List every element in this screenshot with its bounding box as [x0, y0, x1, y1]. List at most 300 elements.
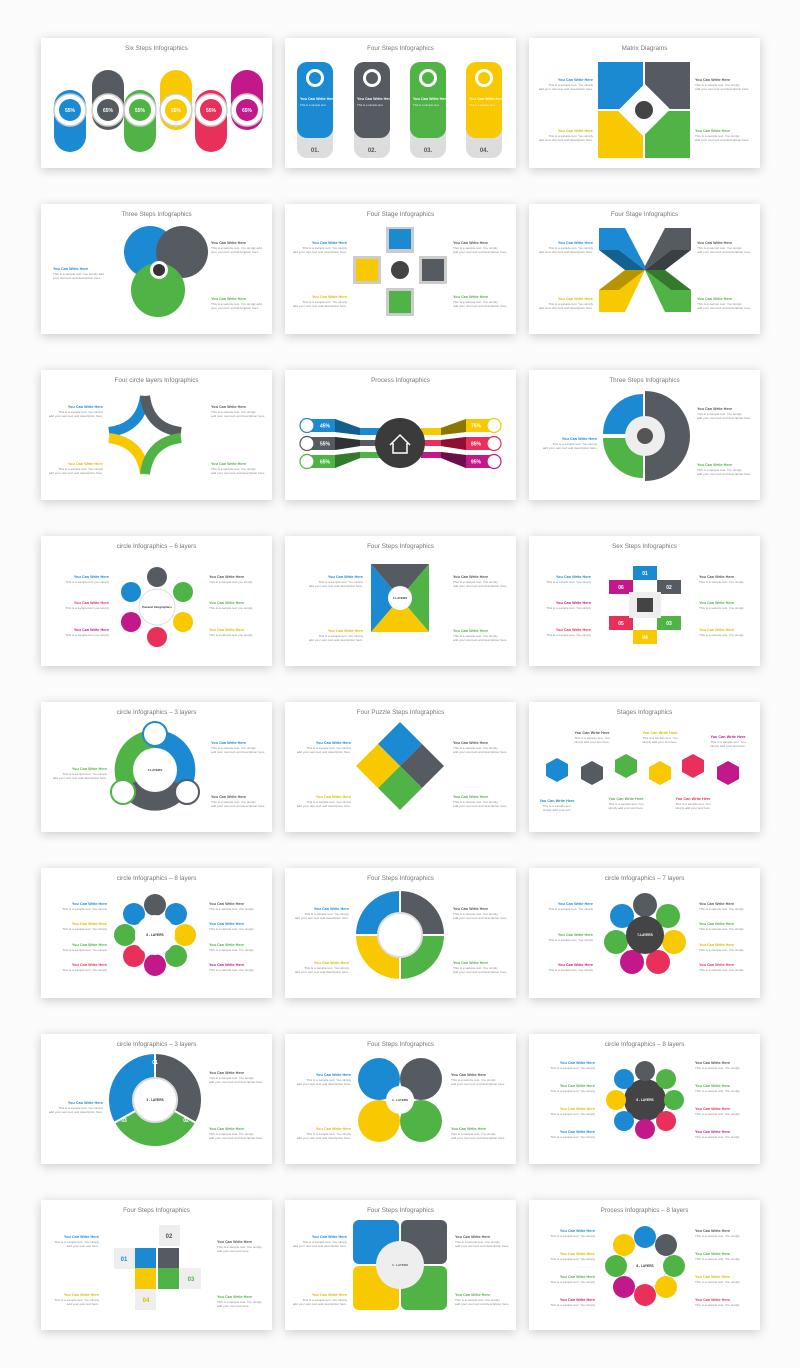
- text blocks: You Can Write Here: [560, 1252, 595, 1256]
- text blocks: This is a sample text. You simply: [699, 948, 744, 952]
- title: Four Steps Infographics: [367, 45, 434, 52]
- card: circle Infographics – 7 layers: [529, 868, 760, 998]
- text blocks: This is a sample text. You simply: [546, 633, 591, 637]
- text blocks: [49, 1071, 263, 1140]
- text blocks: You Can Write Here: [72, 943, 107, 947]
- step columns: 01.: [311, 148, 320, 154]
- text blocks: simply add your text here.: [642, 740, 678, 744]
- text blocks: add your own text and description here.: [455, 1302, 509, 1306]
- text blocks: This is a sample text. You simply: [209, 927, 254, 931]
- text blocks: You Can Write Here: [211, 405, 246, 409]
- text blocks: add your own text and description here.: [209, 1080, 263, 1084]
- text blocks: This is a sample text. You simply: [451, 1078, 496, 1082]
- text blocks: You Can Write Here: [209, 575, 244, 579]
- title: Four Stage Infographics: [367, 211, 434, 218]
- text blocks: This is a sample text you simply: [209, 633, 253, 637]
- text blocks: You Can Write Here: [455, 1293, 490, 1297]
- text blocks: You Can Write Here: [451, 1127, 486, 1131]
- text blocks: This is a sample text. You simply: [453, 912, 498, 916]
- text blocks: You Can Write Here: [53, 267, 88, 271]
- text blocks: This is a sample text. You simply: [550, 1280, 595, 1284]
- text blocks: You Can Write Here: [695, 78, 730, 82]
- card: Four Steps Infographics (petals): [285, 1034, 516, 1164]
- text blocks: This is a sample text. You simply: [217, 1245, 262, 1249]
- card: Four Stage Infographics (X): [529, 204, 760, 334]
- petals: 4 - LAYERS: [392, 1098, 408, 1102]
- text blocks: This is a sample text. You simply: [548, 938, 593, 942]
- text blocks: This is a sample text you simply: [65, 633, 109, 637]
- hexagons: [609, 566, 681, 644]
- text blocks: You Can Write Here: [316, 1073, 351, 1077]
- text blocks: You Can Write Here: [558, 78, 593, 82]
- text blocks: You Can Write Here: [558, 902, 593, 906]
- text blocks: add your own text and description here.: [453, 304, 507, 308]
- text blocks: simply add your text here.: [574, 740, 610, 744]
- text blocks: This is a sample text. You simply: [548, 134, 593, 138]
- donut: 03: [121, 1118, 127, 1124]
- text blocks: You Can Write Here: [312, 295, 347, 299]
- blocks: 04: [143, 1298, 150, 1304]
- blocks: [114, 1225, 201, 1310]
- card: Process Infographics: [285, 370, 516, 500]
- title: circle Infographics – 7 layers: [605, 875, 684, 882]
- text blocks: This is a sample text. You simply: [699, 968, 744, 972]
- text blocks: You Can Write Here: [68, 1101, 103, 1105]
- ring: [355, 890, 445, 980]
- text blocks: This is a sample text. You simply: [550, 1112, 595, 1116]
- step columns: You Can Write Here: [357, 97, 392, 101]
- text blocks: This is a sample text. You simply: [697, 302, 742, 306]
- text blocks: This is a sample text you simply: [209, 580, 253, 584]
- card: Six Steps Infographics: [41, 38, 272, 168]
- text blocks: You Can Write Here: [314, 961, 349, 965]
- text blocks: [53, 741, 265, 808]
- text blocks: [309, 575, 507, 642]
- text blocks: This is a sample text. You simply: [58, 467, 103, 471]
- text blocks: add your own text and description here.: [697, 416, 751, 420]
- text blocks: [548, 902, 744, 972]
- petals: 7-LAYERS: [637, 933, 653, 937]
- title: Four Steps Infographics: [367, 1041, 434, 1048]
- text blocks: [550, 1229, 740, 1307]
- text blocks: You Can Write Here: [697, 241, 732, 245]
- text blocks: This is a sample text. You simply: [699, 606, 744, 610]
- text blocks: add your own text here.: [67, 1244, 99, 1248]
- text blocks: add your own text and description here.: [297, 1082, 351, 1086]
- text blocks: You Can Write Here: [560, 1107, 595, 1111]
- text blocks: add your own text and description here.: [309, 584, 363, 588]
- text blocks: You Can Write Here: [453, 295, 488, 299]
- text blocks: This is a sample text. You simply: [453, 246, 498, 250]
- text blocks: You Can Write Here: [209, 628, 244, 632]
- text blocks: You Can Write Here: [560, 1229, 595, 1233]
- text blocks: add your own text and description here.: [49, 414, 103, 418]
- text blocks: You Can Write Here: [699, 601, 734, 605]
- text blocks: You Can Write Here: [697, 463, 732, 467]
- text blocks: add your own text and description here.: [453, 584, 507, 588]
- text blocks: add your own text and description here.: [309, 638, 363, 642]
- blocks: 02: [166, 1234, 173, 1240]
- text blocks: This is a sample text. You simply: [697, 412, 742, 416]
- bars: 45%: [320, 424, 331, 430]
- step columns: This is a sample text.: [413, 103, 439, 107]
- text blocks: add your own text and description here.: [209, 1136, 263, 1140]
- text blocks: This is a sample text. You simply: [58, 410, 103, 414]
- text blocks: This is a sample text. You: [608, 802, 644, 806]
- text blocks: This is a sample text.: [542, 804, 572, 808]
- text blocks: You Can Write Here: [72, 922, 107, 926]
- text blocks: add your own text and description here.: [293, 250, 347, 254]
- text blocks: This is a sample text. You simply: [546, 606, 591, 610]
- text blocks: [293, 1235, 509, 1306]
- text blocks: add your own text and description here.: [211, 750, 265, 754]
- text blocks: This is a sample text. You simply: [306, 800, 351, 804]
- text blocks: You Can Write Here: [72, 963, 107, 967]
- card: circle Infographics – 6 layers: [41, 536, 272, 666]
- text blocks: add your own text and description here.: [211, 414, 265, 418]
- text blocks: This is a sample text you simply: [65, 606, 109, 610]
- card: Four Steps Infographics: [285, 38, 516, 168]
- text blocks: add your own text and description here.: [453, 916, 507, 920]
- text blocks: add your own text and description here.: [543, 446, 597, 450]
- card: Three Steps Infographics: [41, 204, 272, 334]
- hexagons: 05: [618, 621, 624, 627]
- text blocks: [62, 902, 254, 972]
- title: Four Stage Infographics: [611, 211, 678, 218]
- text blocks: [49, 405, 265, 475]
- text blocks: This is a sample text. You simply: [695, 1257, 740, 1261]
- title: circle Infographics – 3 layers: [117, 709, 196, 716]
- text blocks: This is a sample text. You simply add: [211, 302, 262, 306]
- text blocks: simply add your text here.: [675, 806, 711, 810]
- text blocks: add your own text here.: [217, 1304, 249, 1308]
- text blocks: [54, 1235, 262, 1308]
- text blocks: This is a sample text you simply: [65, 580, 109, 584]
- text blocks: You Can Write Here: [560, 1130, 595, 1134]
- text blocks: This is a sample text. You simply: [302, 1298, 347, 1302]
- text blocks: You Can Write Here: [699, 628, 734, 632]
- text blocks: You Can Write Here: [453, 575, 488, 579]
- text blocks: This is a sample text. You simply: [54, 1240, 99, 1244]
- text blocks: your own text and description here.: [53, 276, 101, 280]
- text blocks: This is a sample text. You simply: [302, 246, 347, 250]
- title: circle Infographics – 3 layers: [117, 1041, 196, 1048]
- ring: 8 - LAYERS: [636, 1098, 654, 1102]
- text blocks: This is a sample text. You simply: [699, 633, 744, 637]
- text blocks: This is a sample text. You simply: [62, 948, 107, 952]
- card: Four Steps Infographics (square): [285, 536, 516, 666]
- text blocks: You Can Write Here: [699, 902, 734, 906]
- text blocks: add your own text and description here.: [297, 804, 351, 808]
- text blocks: This is a sample text. You simply: [455, 1240, 500, 1244]
- text blocks: This is a sample text. You simply: [209, 1076, 254, 1080]
- title: Sex Steps Infographics: [612, 543, 677, 550]
- text blocks: add your own text and description here.: [49, 471, 103, 475]
- text blocks: This is a sample text. You simply: [62, 772, 107, 776]
- text blocks: add your own text and description here.: [697, 250, 751, 254]
- step columns: This is a sample text.: [300, 103, 326, 107]
- text blocks: This is a sample text. You simply: [58, 1106, 103, 1110]
- text blocks: You Can Write Here: [695, 1130, 730, 1134]
- title: Four circle layers Infographics: [114, 377, 198, 384]
- text blocks: You Can Write Here: [558, 129, 593, 133]
- card: Four Puzzle Steps Infographics: [285, 702, 516, 832]
- text blocks: This is a sample text. You simply: [318, 580, 363, 584]
- text blocks: This is a sample text. You simply: [695, 1066, 740, 1070]
- bars: [300, 418, 501, 468]
- text blocks: This is a sample text. You simply: [550, 1066, 595, 1070]
- text blocks: [550, 1061, 740, 1139]
- text blocks: add your own text and description here.: [697, 306, 751, 310]
- text blocks: add your own text and description here.: [539, 87, 593, 91]
- circle ring: Paceral Infographics: [142, 605, 172, 609]
- puzzle diamond: [356, 722, 444, 810]
- donut: [603, 391, 690, 481]
- text blocks: You Can Write Here: [558, 241, 593, 245]
- card: Process Infographics – 8 layers: [529, 1200, 760, 1330]
- text blocks: This is a sample text. You simply: [455, 1298, 500, 1302]
- text blocks: You Can Write Here: [209, 963, 244, 967]
- text blocks: You Can Write Here: [209, 902, 244, 906]
- blocks: 01: [121, 1257, 128, 1263]
- text blocks: add your own text and description here.: [451, 1082, 505, 1086]
- text blocks: This is a sample text. You simply: [550, 1234, 595, 1238]
- title: circle Infographics – 8 layers: [117, 875, 196, 882]
- text blocks: This is a sample text. You simply: [211, 800, 256, 804]
- ring: [605, 1226, 685, 1306]
- text blocks: This is a sample text. You simply: [302, 1240, 347, 1244]
- text blocks: add your own text and description here.: [453, 750, 507, 754]
- text blocks: You Can Write Here: [558, 933, 593, 937]
- bars: 55%: [320, 442, 331, 448]
- text blocks: This is a sample text. You simply: [209, 907, 254, 911]
- circles: [124, 226, 208, 317]
- text blocks: You Can Write Here: [695, 1107, 730, 1111]
- text blocks: This is a sample text. You: [710, 740, 746, 744]
- title: Process Infographics: [371, 377, 430, 384]
- title: circle Infographics – 6 layers: [117, 543, 196, 550]
- text blocks: This is a sample text. You simply: [697, 468, 742, 472]
- step columns: This is a sample text.: [469, 103, 495, 107]
- step pills: 55%: [135, 108, 146, 114]
- text blocks: You Can Write Here: [211, 462, 246, 466]
- curved star: [109, 396, 181, 474]
- step columns: [297, 62, 504, 158]
- text blocks: This is a sample text. You simply: [62, 968, 107, 972]
- text blocks: add your own text and description here.: [49, 1110, 103, 1114]
- text blocks: This is a sample text. You simply: [209, 968, 254, 972]
- blocks: 03: [188, 1277, 195, 1283]
- text blocks: This is a sample text. You simply: [699, 907, 744, 911]
- text blocks: This is a sample text. You simply: [550, 1135, 595, 1139]
- text blocks: simply add your text.: [543, 808, 571, 812]
- petals: [114, 894, 196, 976]
- text blocks: You Can Write Here: [72, 902, 107, 906]
- text blocks: simply add your text here.: [608, 806, 644, 810]
- text blocks: This is a sample text. You simply: [451, 1132, 496, 1136]
- text blocks: You Can Write Here: [328, 575, 363, 579]
- title: Four Steps Infographics: [367, 543, 434, 550]
- square with triangles: 4 LAYERS: [393, 596, 407, 600]
- text blocks: add your own text and description here.: [211, 471, 265, 475]
- step pills: 65%: [242, 108, 253, 114]
- text blocks: This is a sample text. You simply: [550, 1257, 595, 1261]
- text blocks: This is a sample text. You simply: [697, 246, 742, 250]
- text blocks: You Can Write Here: [209, 922, 244, 926]
- text blocks: This is a sample text. You simply: [453, 580, 498, 584]
- text blocks: You Can Write Here: [695, 129, 730, 133]
- text blocks: You Can Write Here: [453, 241, 488, 245]
- text blocks: This is a sample text. You simply: [695, 1234, 740, 1238]
- card: Sex Steps Infographics (hexagons): [529, 536, 760, 666]
- cross squares: [353, 227, 447, 316]
- text blocks: [539, 731, 746, 812]
- text blocks: add your own text and description here.: [695, 87, 749, 91]
- text blocks: This is a sample text. You simply: [302, 300, 347, 304]
- text blocks: You Can Write Here: [558, 297, 593, 301]
- text blocks: [297, 741, 507, 808]
- text blocks: You Can Write Here: [74, 628, 109, 632]
- text blocks: [295, 907, 507, 974]
- text blocks: This is a sample text. You simply: [209, 1132, 254, 1136]
- text blocks: add your own text and description here.: [455, 1244, 509, 1248]
- title: Four Steps Infographics: [123, 1207, 190, 1214]
- text blocks: This is a sample text. You simply: [695, 1303, 740, 1307]
- text blocks: This is a sample text. You simply: [453, 300, 498, 304]
- text blocks: You Can Write Here: [217, 1240, 252, 1244]
- text blocks: You Can Write Here: [64, 1235, 99, 1239]
- card: circle Infographics – 3 layers: [41, 702, 272, 832]
- text blocks: add your own text and description here.: [297, 750, 351, 754]
- text blocks: You Can Write Here: [695, 1061, 730, 1065]
- quadrants: [353, 1220, 447, 1310]
- step columns: 03.: [424, 148, 433, 154]
- text blocks: You Can Write Here: [697, 297, 732, 301]
- card: circle Infographics – 8 layers: [41, 868, 272, 998]
- text blocks: This is a sample text. You simply: [211, 410, 256, 414]
- text blocks: You Can Write Here: [556, 575, 591, 579]
- text blocks: This is a sample text. You simply add: [211, 246, 262, 250]
- card: Four Steps Infographics (blocks): [41, 1200, 272, 1330]
- card: Stages Infographics: [529, 702, 760, 832]
- text blocks: This is a sample text. You simply: [695, 83, 740, 87]
- text blocks: add your own text and description here.: [293, 304, 347, 308]
- text blocks: This is a sample text. You simply: [304, 912, 349, 916]
- text blocks: add your own text here.: [217, 1249, 249, 1253]
- donut: 01: [152, 1060, 158, 1066]
- text blocks: simply add your text here.: [710, 744, 746, 748]
- text blocks: You Can Write Here: [453, 795, 488, 799]
- text blocks: You Can Write Here: [699, 922, 734, 926]
- text blocks: This is a sample text. You simply: [453, 966, 498, 970]
- text blocks: You Can Write Here: [695, 1252, 730, 1256]
- text blocks: This is a sample text. You simply: [695, 134, 740, 138]
- text blocks: This is a sample text. You simply: [54, 1298, 99, 1302]
- text blocks: You Can Write Here: [312, 1293, 347, 1297]
- text blocks: You Can Write Here: [699, 963, 734, 967]
- text blocks: This is a sample text. You simply: [548, 968, 593, 972]
- petals: 8 - LAYERS: [146, 933, 164, 937]
- text blocks: You Can Write Here: [217, 1295, 252, 1299]
- ring: [111, 722, 199, 811]
- text blocks: This is a sample text. You simply: [217, 1300, 262, 1304]
- text blocks: This is a sample text. You simply: [548, 907, 593, 911]
- text blocks: [543, 407, 751, 476]
- text blocks: This is a sample text. You simply: [550, 1303, 595, 1307]
- text blocks: add your own text and description here.: [53, 776, 107, 780]
- matrix: [598, 62, 690, 158]
- text blocks: This is a sample text. You simply: [453, 634, 498, 638]
- bars: 85%: [471, 442, 482, 448]
- text blocks: [539, 78, 749, 142]
- text blocks: You Can Write Here: [562, 437, 597, 441]
- title: Stages Infographics: [617, 709, 672, 716]
- text blocks: You Can Write Here: [211, 795, 246, 799]
- text blocks: You Can Write Here: [64, 1293, 99, 1297]
- text blocks: This is a sample text. You simply: [211, 467, 256, 471]
- text blocks: You Can Write Here: [695, 1229, 730, 1233]
- text blocks: This is a sample text. You simply: [62, 927, 107, 931]
- text blocks: add your own text and description here.: [211, 804, 265, 808]
- hexagons row: [546, 754, 739, 785]
- step columns: You Can Write Here: [413, 97, 448, 101]
- text blocks: You Can Write Here: [312, 241, 347, 245]
- donut: [108, 1053, 202, 1147]
- text blocks: This is a sample text. You simply: [209, 948, 254, 952]
- text blocks: You Can Write Here: [68, 462, 103, 466]
- text blocks: add your own text and description here.: [295, 916, 349, 920]
- text blocks: You Can Write Here: [453, 741, 488, 745]
- text blocks: You Can Write Here: [314, 907, 349, 911]
- title: Matrix Diagrams: [622, 45, 667, 52]
- text blocks: This is a sample text. You simply: [318, 634, 363, 638]
- ring: [606, 1061, 684, 1139]
- title: circle Infographics – 8 layers: [605, 1041, 684, 1048]
- step columns: 04.: [480, 148, 489, 154]
- text blocks: You Can Write Here: [455, 1235, 490, 1239]
- text blocks: add your own text and description here.: [293, 1244, 347, 1248]
- text blocks: add your own text and description here.: [297, 1136, 351, 1140]
- title: Four Steps Infographics: [367, 1207, 434, 1214]
- card: Four Stage Infographics (cross): [285, 204, 516, 334]
- text blocks: add your own text and description here.: [453, 638, 507, 642]
- text blocks: This is a sample text. You simply: [695, 1135, 740, 1139]
- text blocks: [65, 575, 253, 637]
- step pills: 65%: [103, 108, 114, 114]
- text blocks: You Can Write Here: [695, 1298, 730, 1302]
- donut: 3 - LAYERS: [146, 1098, 164, 1102]
- step columns: You Can Write Here: [300, 97, 335, 101]
- step columns: You Can Write Here: [469, 97, 504, 101]
- quadrants: 4 - LAYERS: [392, 1263, 408, 1267]
- bars: 95%: [471, 460, 482, 466]
- text blocks: You Can Write Here: [74, 575, 109, 579]
- text blocks: This is a sample text. You simply: [62, 907, 107, 911]
- text blocks: [539, 241, 751, 310]
- donut: 02: [183, 1118, 189, 1124]
- text blocks: This is a sample text. You simply: [306, 1078, 351, 1082]
- text blocks: You Can Write Here: [209, 601, 244, 605]
- text blocks: your own text and description here.: [211, 250, 259, 254]
- text blocks: You Can Write Here: [556, 601, 591, 605]
- text blocks: This is a sample text. You simply add: [53, 272, 104, 276]
- text blocks: add your own text and description here.: [695, 138, 749, 142]
- text blocks: [293, 241, 507, 308]
- text blocks: You Can Write Here: [328, 629, 363, 633]
- step pills: [54, 70, 263, 152]
- text blocks: You Can Write Here: [316, 795, 351, 799]
- text blocks: You Can Write Here: [608, 797, 644, 801]
